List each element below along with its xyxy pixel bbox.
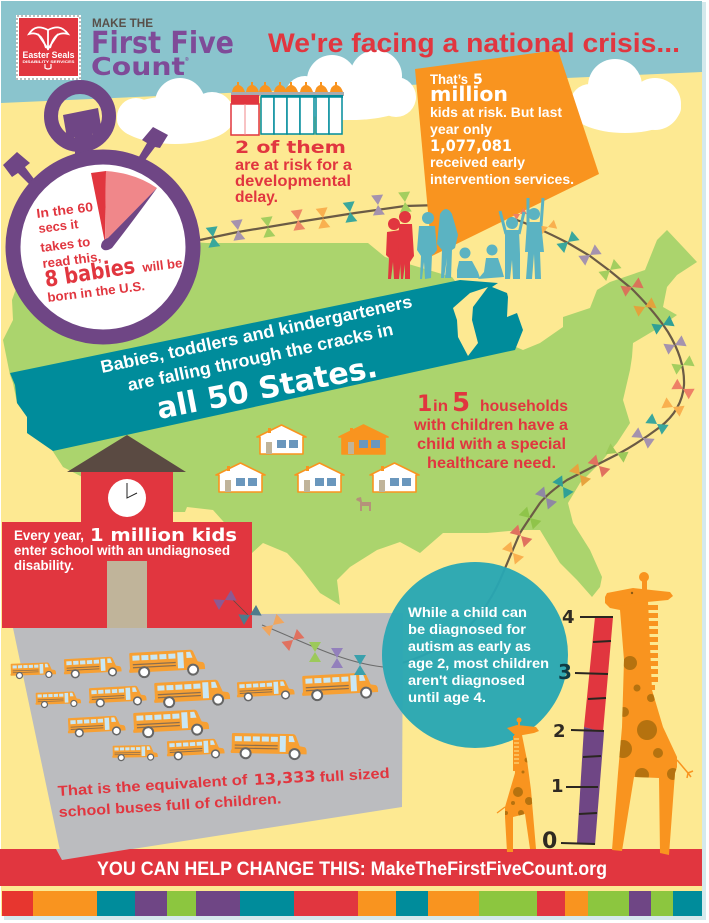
text: 13,333 buses: school buses full of children. — [58, 791, 282, 821]
dial — [13, 157, 193, 337]
text: 2 of them: 2 of them — [235, 138, 346, 158]
call-to-action text: YOU CAN HELP CHANGE THIS: MakeTheFirstFiveCount.org — [97, 859, 607, 880]
stopwatch text — [36, 199, 183, 305]
campaign wordmark: MAKE THE — [92, 18, 153, 30]
kite text: That’s — [430, 71, 468, 87]
campaign wordmark — [91, 18, 234, 81]
colour strip — [2, 891, 702, 916]
map of the United States — [3, 230, 697, 605]
kite text: 5 — [473, 72, 483, 88]
text: 2 of them: developmental — [235, 173, 351, 190]
text: 1 in 5 households: in — [433, 398, 448, 415]
small giraffe mane — [513, 736, 519, 771]
giraffe body — [612, 601, 677, 855]
door — [107, 561, 147, 628]
banner text — [99, 291, 414, 427]
clouds — [117, 50, 681, 144]
banner text: Babies, toddlers and kindergarteners — [99, 291, 414, 377]
text: 2 of them: are at risk for a — [235, 157, 352, 174]
text: 1 in 5 households: 1 — [417, 392, 432, 417]
sky — [1, 1, 702, 103]
kite text: intervention services. — [430, 171, 574, 187]
stopwatch text: secs it — [38, 216, 80, 236]
text: 1 in 5 households: with children have a — [413, 417, 568, 434]
small flags beside the children — [513, 208, 557, 234]
giraffe head — [605, 588, 673, 610]
small giraffe tail — [497, 807, 505, 813]
giraffe mane — [647, 605, 658, 690]
stopwatch text: takes to — [40, 234, 91, 255]
circle text: be diagnosed for — [408, 621, 527, 637]
banner text: all 50 States. — [154, 350, 380, 427]
small giraffe — [497, 718, 539, 852]
small giraffe spots — [504, 758, 533, 816]
circle text: age 2, most children — [408, 655, 549, 671]
text: 2 of them: delay. — [235, 189, 278, 206]
school buses — [10, 649, 378, 761]
school text: disability. — [14, 558, 74, 573]
autism circle — [382, 562, 568, 748]
stopwatch text: born in the U.S. — [47, 278, 146, 305]
title: We're facing a national crisis... — [268, 28, 680, 58]
kite text: million — [430, 82, 508, 106]
campaign wordmark: ® — [185, 56, 189, 63]
circle text: autism as early as — [408, 638, 531, 654]
logo: Easter Seals stamp: Easter Seals — [22, 50, 74, 60]
school text: Every year, — [14, 528, 84, 543]
kite: 5 million kids at risk — [415, 50, 599, 256]
kite text: kids at risk. But last — [430, 104, 562, 120]
giraffe spots — [619, 656, 676, 780]
stem — [63, 108, 102, 157]
stopwatch text: In the 60 — [36, 199, 94, 221]
circle text — [408, 604, 549, 705]
stopwatch text: read this, — [42, 249, 102, 271]
text: 1 in 5 households: 5 — [452, 388, 470, 418]
ruler numbers: 4 — [562, 607, 575, 628]
elapsed wedge — [91, 171, 106, 243]
kite text — [430, 71, 574, 187]
height ruler — [542, 607, 613, 854]
grey lot corner overlap — [56, 849, 130, 860]
circle text: until age 4. — [408, 689, 486, 705]
bunting string — [200, 205, 684, 667]
grey school bus lot — [13, 613, 403, 860]
stopwatch text: 8 babies — [43, 254, 137, 293]
clock — [108, 479, 146, 517]
ruler numbers: 2 — [553, 721, 566, 742]
bunting flags — [206, 192, 695, 565]
circle text: aren't diagnosed — [408, 672, 525, 688]
small giraffe body — [505, 735, 536, 852]
text: 1 in 5 households — [413, 388, 568, 472]
ruler numbers: 0 — [542, 829, 557, 854]
text: 13,333 buses — [57, 766, 390, 821]
school text: 1 million kids — [90, 525, 237, 546]
logo: Easter Seals stamp: DISABILITY SERVICES — [22, 60, 75, 64]
logo: Easter Seals stamp — [16, 15, 81, 80]
campaign wordmark: Count — [91, 52, 185, 81]
crown ring — [51, 87, 109, 145]
text: 1 in 5 households: healthcare need. — [427, 455, 556, 472]
small string and flags over school and lot — [213, 590, 383, 675]
ruler ticks — [561, 617, 613, 844]
text: 1 in 5 households: households — [480, 398, 568, 415]
schoolhouse — [2, 435, 252, 628]
houses — [216, 425, 419, 492]
lily mark — [29, 27, 68, 50]
children silhouettes — [386, 198, 544, 279]
campaign wordmark: First Five — [91, 26, 234, 61]
roof — [67, 435, 186, 472]
banner: falling through the cracks — [10, 280, 523, 451]
text: 13,333 buses: 13,333 — [253, 767, 316, 789]
building — [2, 522, 252, 628]
tower — [81, 472, 173, 524]
kite text: 1,077,081 — [430, 136, 512, 155]
circle text: While a child can — [408, 604, 527, 620]
Lake Michigan — [453, 287, 488, 356]
text: 13,333 buses: full sized — [319, 766, 390, 786]
kite text: year only — [430, 121, 492, 137]
hand — [101, 188, 157, 250]
kite text: received early — [430, 154, 525, 170]
small giraffe head — [507, 725, 539, 735]
red call-to-action band — [0, 849, 702, 886]
blue children — [417, 198, 544, 279]
baby bottles — [231, 82, 344, 135]
icon: dog — [356, 497, 371, 511]
text: 2 of them — [235, 138, 352, 206]
ruler numbers — [542, 607, 575, 854]
stopwatch — [3, 87, 193, 337]
school text: enter school with an undiagnosed — [14, 543, 230, 558]
text: 1 in 5 households: child with a special — [417, 436, 566, 453]
text: 13,333 buses: That is the equivalent of — [57, 772, 248, 800]
giraffe tail — [677, 760, 693, 778]
red pair — [386, 211, 414, 279]
banner text: are falling through the cracks in — [126, 319, 395, 395]
ruler numbers: 3 — [558, 660, 572, 684]
big giraffe — [605, 572, 693, 855]
school text — [14, 525, 237, 573]
side buttons — [137, 127, 168, 163]
ruler numbers: 1 — [551, 776, 564, 797]
stopwatch text: will be — [141, 255, 183, 275]
